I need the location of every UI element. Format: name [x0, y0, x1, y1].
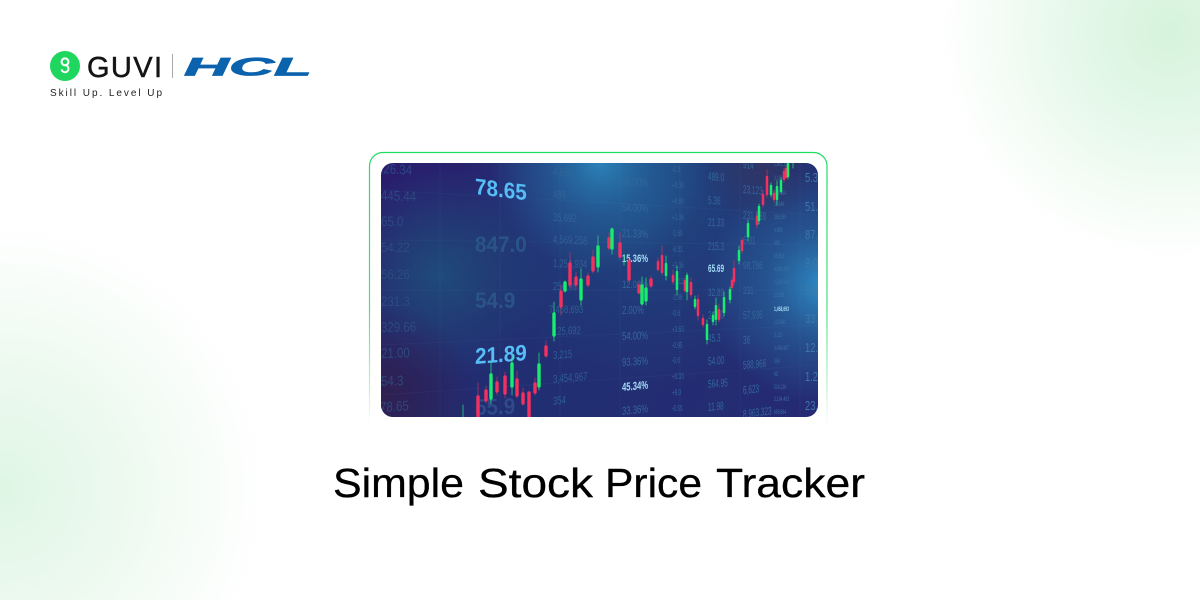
data column: volumes: 1,254,934	[553, 258, 588, 272]
data column: changes: +1.12	[672, 278, 684, 286]
data column: volumes: 354	[553, 394, 566, 409]
data column: volumes right: 6.31	[743, 234, 756, 247]
logo divider	[172, 54, 173, 78]
data column: changes: -3.96	[672, 294, 683, 302]
data column: tiny figures: 35,692	[774, 253, 784, 260]
data column: tiny figures: 3,184,463	[774, 396, 789, 403]
data column: far right figures: 33.0	[805, 313, 823, 326]
data column: prices centre: 215.3	[708, 240, 724, 253]
data column: volumes: 3,454,967	[553, 371, 587, 387]
data column: prices centre: 54.00	[708, 354, 724, 367]
data column: volumes: 489	[553, 189, 566, 202]
data column: tiny figures: 656,864	[774, 409, 786, 416]
data column: tiny figures: 3,198	[774, 175, 783, 182]
data column: tiny figures: 1,254,934	[774, 279, 789, 286]
GUVI wordmark: GUVI	[87, 52, 162, 84]
data column: changes: +9.0	[672, 389, 681, 397]
data column: prices centre: 564.95	[708, 376, 728, 390]
data column: changes: -0.55	[672, 405, 683, 413]
data column: far left prices: 78.65	[380, 397, 409, 415]
data column: changes: -0.6	[672, 310, 680, 318]
data column: far right figures: 9.02	[805, 257, 823, 270]
data column: large prices: 847.0	[475, 231, 527, 257]
data column: changes: +0.33	[672, 373, 684, 381]
title: Stock	[478, 460, 594, 506]
red candle bodies, right part	[658, 169, 786, 324]
data column: tiny figures: 1,458,693	[774, 306, 789, 313]
data column: volumes: 4,856	[553, 166, 573, 180]
data column: volumes: 125,692	[553, 325, 581, 339]
data column: percentages: 93.36%	[622, 355, 648, 370]
green candle bodies, right part	[666, 164, 788, 339]
green candle wicks	[463, 160, 793, 417]
title	[333, 460, 865, 506]
image background	[381, 163, 818, 417]
data column: prices centre: 65.69	[708, 262, 724, 274]
data column: far left prices: 54.22	[381, 239, 410, 255]
data column: large prices	[475, 173, 527, 420]
data column: volumes right: 57,936	[743, 308, 763, 321]
data column: volumes right: 36	[743, 334, 750, 346]
green candle bodies, left part	[491, 230, 646, 398]
data column: tiny figures: 489	[774, 240, 780, 247]
data column: prices centre: 32.89	[708, 286, 724, 298]
data column: percentages: 33.36%	[622, 403, 648, 419]
data column: changes: +9.36	[672, 182, 684, 190]
data column: prices centre: 24.00	[708, 309, 724, 321]
data column: volumes: 254,98	[553, 281, 577, 294]
data column: changes: +1.36	[672, 262, 684, 270]
data column: percentages	[622, 176, 648, 419]
HCL wordmark: HCL	[184, 54, 312, 82]
data column: large prices: 54.9	[475, 287, 515, 313]
data column: volumes right: 6,623	[743, 382, 759, 396]
data column: volumes right: 231,688	[743, 209, 766, 223]
red candle bodies, left part	[478, 239, 651, 416]
icon: GUVI green circle	[50, 51, 80, 81]
data column: percentages: 2.00%	[622, 304, 644, 318]
data column: tiny figures: 524,136	[774, 384, 786, 391]
data column: tiny figures: 4,856	[774, 227, 783, 234]
data column: volumes: 3,215	[553, 348, 573, 363]
data column: volumes: 4,569,258	[553, 234, 588, 248]
data column: changes: -1.69	[672, 230, 683, 238]
data column: large prices: 78.65	[475, 173, 527, 205]
data column: tiny figures	[774, 161, 789, 416]
logo: GUVI and HCL	[50, 51, 312, 99]
data column: tiny figures: 3,215	[774, 332, 783, 339]
title: Tracker	[716, 460, 865, 506]
data column: tiny figures: 4,569,258	[774, 266, 789, 273]
data column: far right figures: 5.35	[805, 172, 823, 185]
data column: far left prices: 526.34	[377, 160, 412, 178]
data column: tiny figures: 664,464	[774, 190, 786, 197]
data column: far right figures: 87.9	[805, 229, 823, 242]
data column: far left prices: 445.44	[381, 187, 416, 205]
data column: far left prices: 54.3	[381, 372, 403, 389]
data column: far left prices	[381, 164, 416, 412]
data column: volumes right: 23,123	[743, 183, 763, 197]
data column: volumes right: 8,963,323	[743, 405, 772, 420]
data column: volumes right	[743, 158, 772, 420]
data column: percentages: 36.00%	[622, 176, 648, 190]
data column: volumes right: 914	[743, 158, 754, 172]
data column: changes: +0.89	[672, 198, 684, 206]
data column: volumes	[549, 166, 588, 409]
data column: tiny figures: 356,359	[774, 214, 786, 221]
data column: changes: -0.6	[672, 357, 680, 365]
data column: volumes: 7,458,693	[549, 304, 583, 317]
data column: prices centre: 11.98	[708, 399, 724, 413]
title: Simple	[333, 460, 464, 506]
data column: changes	[672, 166, 684, 413]
data column: percentages: 54.00%	[622, 330, 648, 344]
data column: far left prices: 329.66	[381, 318, 416, 335]
data column: tiny figures: 1,861,323	[774, 161, 789, 168]
data column: prices centre: 21.33	[708, 216, 724, 229]
data column: prices centre	[708, 170, 728, 413]
data column: tiny figures: 25,698	[774, 292, 784, 299]
title: Price	[605, 460, 702, 506]
data column: percentages: 54.00%	[622, 202, 648, 216]
data column: changes: -0.95	[672, 342, 683, 350]
data column: changes: +3.63	[672, 326, 684, 334]
data column: prices centre: 5.36	[708, 194, 721, 207]
stock chart image	[377, 158, 823, 420]
data column: far right figures: 5.64	[805, 285, 823, 298]
data column: changes: -6.31	[672, 246, 683, 254]
data column: prices centre: 45.3	[708, 332, 721, 344]
data column: tiny figures: 35,648	[774, 201, 784, 208]
data column: percentages: 21.33%	[622, 228, 648, 241]
tagline: Skill Up. Level Up	[50, 88, 162, 99]
data column: changes: -0.3	[672, 166, 680, 174]
candlestick chart	[463, 160, 793, 417]
data column: far right figures	[806, 173, 818, 410]
data column: tiny figures: 354	[774, 358, 780, 365]
data column: far right figures: 23.6	[805, 400, 823, 413]
data column: percentages: 45.34%	[622, 379, 648, 395]
data column: far right figures: 51.2	[805, 201, 823, 214]
data column: percentages: 15.36%	[622, 253, 648, 266]
data column: far right figures: 1.25	[805, 371, 823, 384]
data column: tiny figures: 3,454,967	[774, 345, 789, 352]
data column: volumes right: 98,796	[743, 259, 763, 271]
data column: tiny figures: 65	[774, 371, 778, 378]
data column: far left prices: 21.00	[381, 344, 410, 361]
card outline	[370, 152, 827, 425]
data column: percentages: 12.00%	[622, 279, 648, 292]
data column: far right figures: 12.2	[805, 342, 823, 355]
data column: prices centre: 489.0	[708, 170, 724, 184]
data column: changes: +1.36	[672, 214, 684, 222]
data column: volumes right: 588,966	[743, 357, 766, 371]
data column: large prices: 21.89	[475, 339, 527, 369]
data column: volumes: 35,692	[553, 212, 577, 226]
red candle wicks	[478, 166, 786, 417]
data column: tiny figures: 125,692	[774, 319, 786, 326]
data column: volumes right: 231	[743, 284, 754, 296]
data column: far left prices: 56.26	[381, 266, 410, 282]
data column: far left prices: 65.0	[381, 213, 403, 230]
data column: large prices: 55.9	[475, 393, 515, 420]
data column: far left prices: 231.3	[381, 293, 410, 309]
